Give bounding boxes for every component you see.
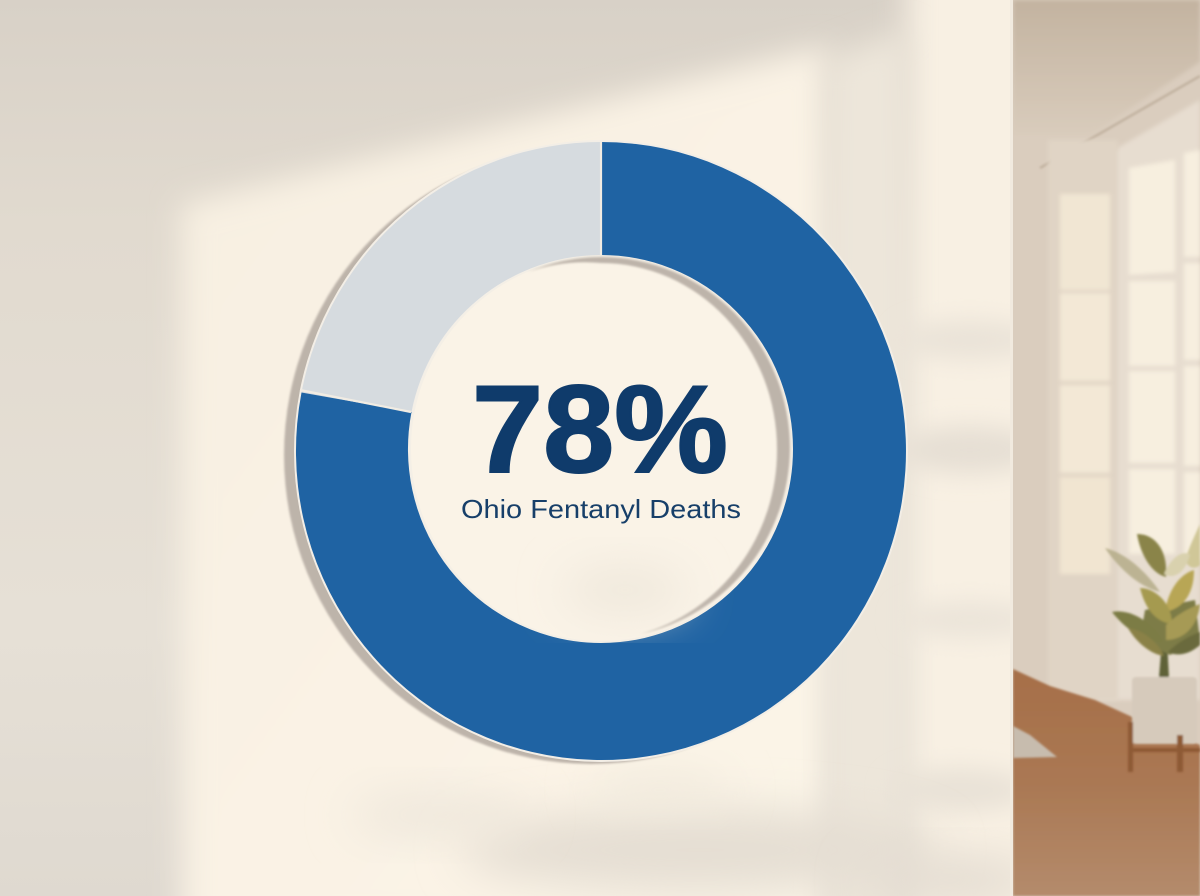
soft shadow in center: [563, 566, 687, 614]
segment separators: [300, 142, 601, 412]
ceiling: [1013, 0, 1200, 106]
window frame: [1118, 102, 1200, 700]
curtain rail: [1040, 76, 1200, 168]
floor rug: [1013, 726, 1057, 758]
segment: remaining 22%: [302, 142, 601, 412]
caption: Ohio Fentanyl Deaths: [461, 494, 741, 524]
sheer curtain: [1048, 140, 1118, 700]
ring outline: [294, 140, 908, 762]
donut chart: [284, 140, 908, 764]
icon: potted plant: [1105, 524, 1200, 772]
segment: 78%: [296, 142, 906, 760]
center hole: [410, 256, 792, 642]
room interior seen through opening: [1013, 0, 1200, 896]
value label: 78%: [472, 361, 728, 499]
floor: [1013, 669, 1200, 896]
wall edge: [1010, 0, 1013, 896]
window panes: [1129, 150, 1200, 560]
drop shadow crescent: [284, 146, 898, 764]
inner shadow crescent: [528, 257, 790, 634]
